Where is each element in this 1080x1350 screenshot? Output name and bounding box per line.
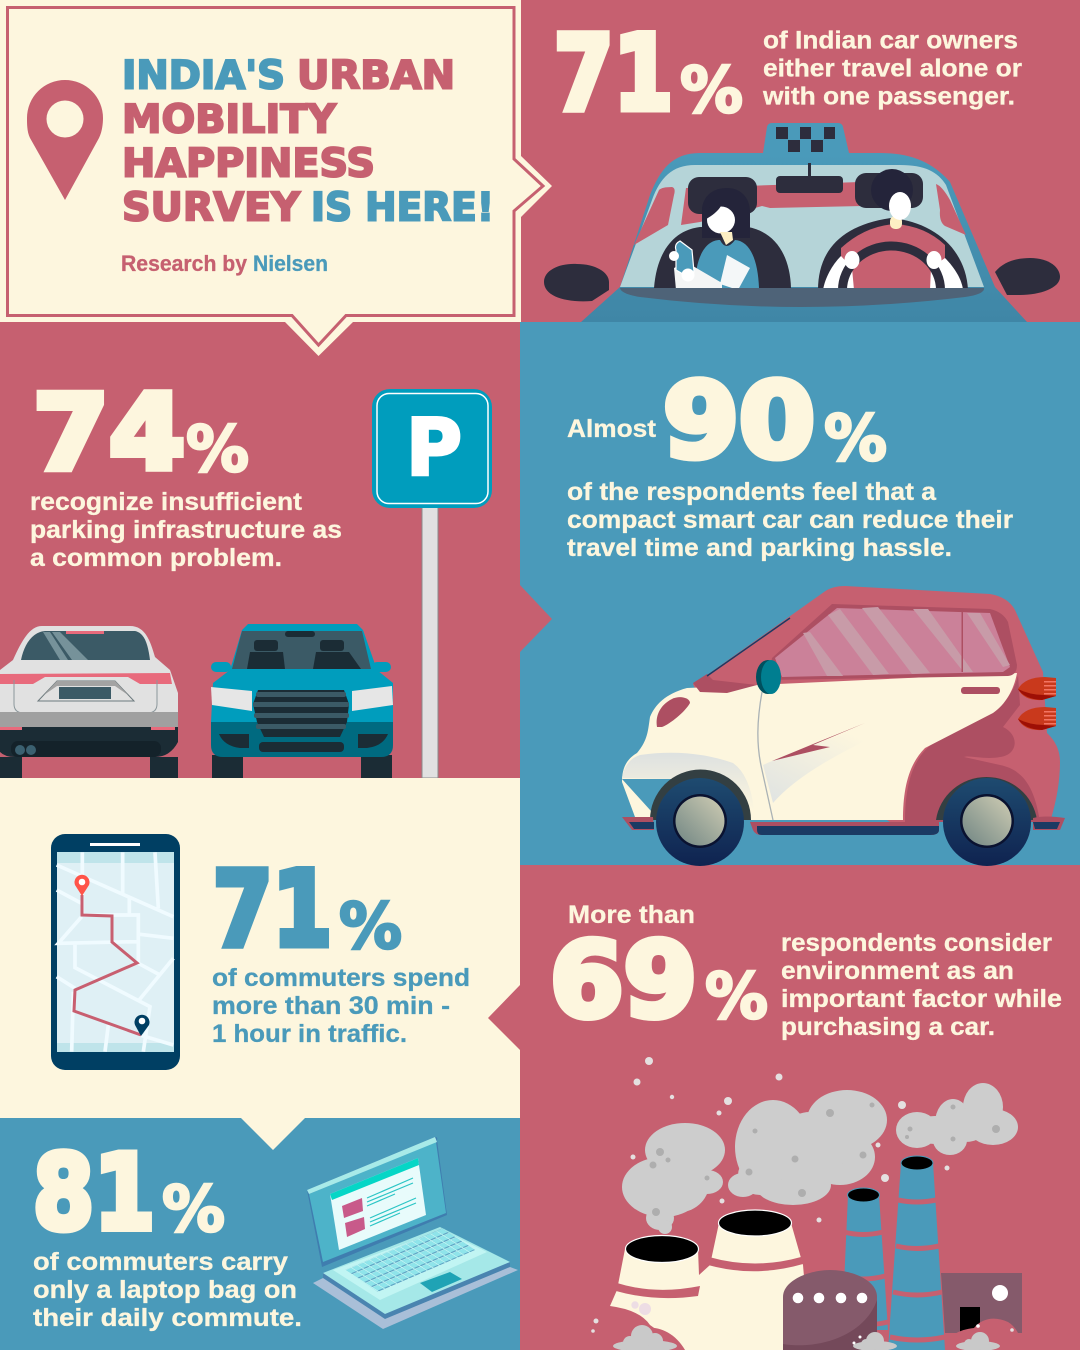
- panel: 90% compact smart car stat: [520, 322, 1080, 866]
- title: HAPPINESS: [122, 142, 375, 186]
- stat: 74 percent: 74: [33, 374, 185, 494]
- panel: 71% traffic time stat: [0, 778, 520, 1150]
- icon: parking sign: P: [406, 404, 462, 494]
- stat: 71 percent: %: [680, 54, 743, 127]
- panel background: [0, 778, 520, 1150]
- stat: more than 69 percent: %: [705, 960, 768, 1033]
- smoke particles: [650, 1102, 1000, 1216]
- panel: 69% environment stat: [550, 901, 1062, 1350]
- panel: 74% parking problem stat: [0, 374, 492, 778]
- illustration: taxi with driver and passenger: [544, 123, 1060, 322]
- stat: 74 percent: %: [186, 413, 249, 486]
- title: MOBILITY: [122, 98, 337, 142]
- illustration: compact smart car: [622, 586, 1065, 866]
- speech bubble background: [0, 0, 552, 356]
- icon: parking sign: [372, 389, 492, 778]
- cooling towers: [610, 1210, 806, 1350]
- text: respondents description: of the respondents feel that a: [567, 478, 937, 506]
- factory building: [941, 1273, 1022, 1335]
- stat: almost 90 percent: %: [824, 402, 887, 475]
- subtitle: research credit: Research by: [121, 251, 248, 276]
- text: laptop bag description: only a laptop bag on: [33, 1276, 297, 1304]
- title: INDIA'S: [122, 54, 285, 98]
- text: commuter traffic description: 1 hour in traffic.: [212, 1020, 407, 1048]
- figure: driver at steering wheel: [823, 169, 963, 290]
- panel: 71% car occupancy stat with taxi: [544, 14, 1060, 322]
- sills: [622, 816, 1065, 835]
- text: environment description: respondents consider: [781, 929, 1052, 957]
- text: Indian car owners description: either travel alone or: [763, 54, 1022, 82]
- stat: 71 percent: 71: [213, 850, 332, 970]
- text: Indian car owners description: [762, 26, 1022, 110]
- panel: title card: [0, 0, 552, 356]
- icon: location pin: [27, 80, 103, 200]
- text: environment description: environment as an: [781, 957, 1014, 985]
- text: Indian car owners description: with one passenger.: [762, 82, 1015, 110]
- stat: almost 90 percent: Almost: [567, 415, 657, 443]
- ground mounds with small clouds: [591, 1318, 1022, 1350]
- text: Indian car owners description: of Indian car owners: [763, 26, 1018, 54]
- text: environment description: [781, 929, 1062, 1041]
- text: laptop bag description: [33, 1248, 302, 1332]
- tail lights: [1018, 677, 1056, 730]
- text: commuter traffic description: [212, 964, 470, 1048]
- front wheel: [656, 778, 744, 866]
- title: SURVEY: [122, 186, 301, 230]
- stat: more than 69 percent: [550, 901, 768, 1041]
- text: environment description: important factor while: [781, 985, 1062, 1013]
- panel background: [520, 322, 1080, 865]
- text: parking description: recognize insufficient: [30, 488, 303, 516]
- title: IS HERE!: [311, 186, 494, 230]
- stat: more than 69 percent: 69: [550, 921, 697, 1041]
- stat: 81 percent: %: [162, 1173, 225, 1246]
- icon: phone with map route: [51, 834, 180, 1070]
- text: respondents description: compact smart car can reduce their: [567, 506, 1013, 534]
- text: commuter traffic description: of commuters spend: [212, 964, 470, 992]
- smoke clouds: [622, 1083, 1018, 1234]
- illustration: blue car front view: [211, 624, 393, 778]
- title: URBAN: [297, 54, 455, 98]
- text: commuter traffic description: more than 30 min -: [212, 992, 450, 1020]
- text: parking description: a common problem.: [30, 544, 282, 572]
- text: laptop bag description: their daily commute.: [33, 1304, 302, 1332]
- speech bubble border: [8, 8, 543, 345]
- subtitle: research credit: [121, 251, 328, 276]
- car body: [693, 586, 1060, 822]
- wheel arches: [650, 770, 751, 820]
- illustration: white car rear view: [0, 626, 178, 778]
- rear wheel: [943, 778, 1031, 866]
- stat: 71 percent: 71: [554, 14, 673, 134]
- storage tank: [783, 1270, 877, 1350]
- panel background: [0, 1118, 520, 1350]
- text: respondents description: [567, 478, 1013, 562]
- text: parking description: parking infrastructure as: [30, 516, 342, 544]
- stat: 74 percent: [33, 374, 249, 494]
- panel: 81% laptop bag stat: [0, 1118, 520, 1350]
- stat: more than 69 percent: More than: [568, 901, 695, 929]
- stat: almost 90 percent: 90: [663, 362, 815, 482]
- subtitle: research credit: Nielsen: [253, 251, 328, 276]
- stat: 71 percent: %: [339, 890, 402, 963]
- text: laptop bag description: of commuters carry: [33, 1248, 288, 1276]
- smokestacks: [842, 1163, 945, 1350]
- stat: 81 percent: 81: [33, 1134, 155, 1254]
- text: respondents description: travel time and parking hassle.: [567, 534, 952, 562]
- illustration: laptop: [307, 1137, 518, 1329]
- illustration: factory with smoke: [591, 1057, 1022, 1350]
- car windows: [768, 604, 1017, 680]
- figure: woman passenger with tablet: [669, 188, 759, 290]
- stat: almost 90 percent: [567, 362, 887, 482]
- title: [122, 54, 494, 230]
- text: environment description: purchasing a car.: [781, 1013, 995, 1041]
- side mirror: [756, 660, 781, 694]
- text: parking description: [30, 488, 342, 572]
